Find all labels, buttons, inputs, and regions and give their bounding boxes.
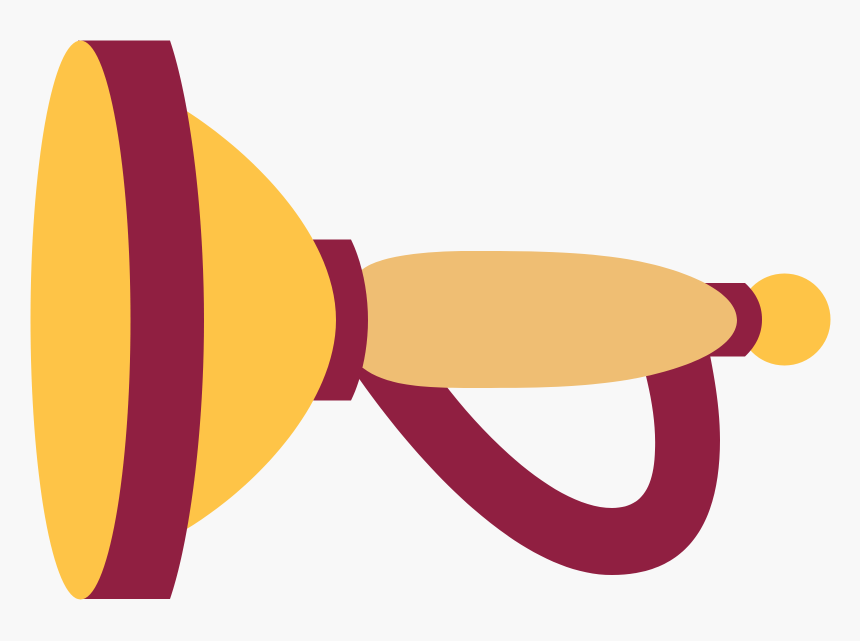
bugle tube loop bbox=[350, 350, 720, 575]
mouthpiece neck bbox=[700, 283, 762, 356]
bell opening bbox=[30, 40, 130, 600]
bell cone bbox=[185, 110, 336, 530]
bell rim bbox=[78, 40, 204, 599]
bell collar bbox=[310, 240, 368, 400]
grip body bbox=[350, 251, 737, 388]
mouthpiece ball bbox=[738, 274, 830, 366]
